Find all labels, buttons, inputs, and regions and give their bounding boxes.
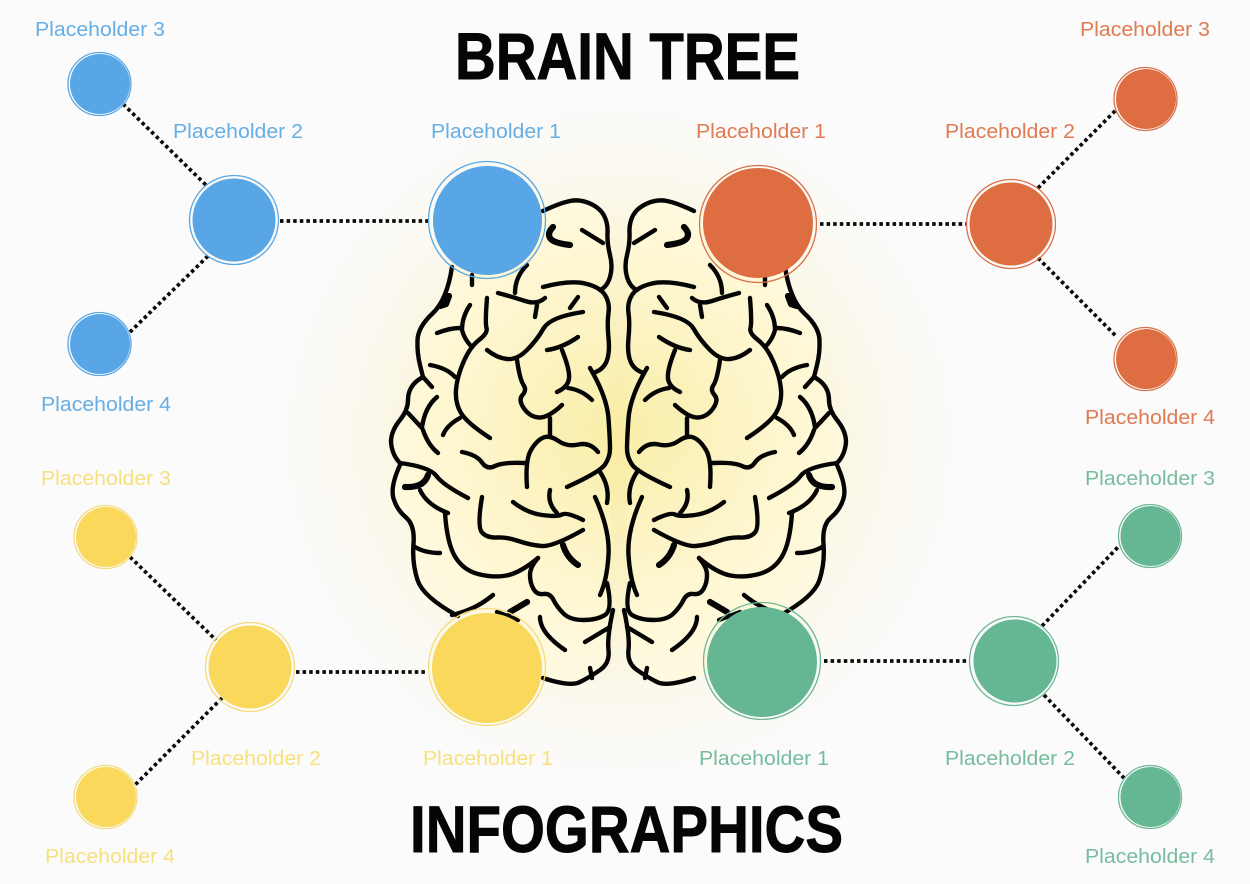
connector: orange node 2 to node 3 xyxy=(1038,110,1116,188)
blue node 4: Placeholder 4 xyxy=(41,394,171,416)
panel: orange branch xyxy=(696,19,1215,429)
panel: yellow branch xyxy=(41,468,553,868)
green node 4: Placeholder 4 xyxy=(1085,846,1215,868)
connector: green node 2 to node 3 xyxy=(1042,545,1120,626)
connector: yellow node 1 to node 2 xyxy=(296,670,428,674)
green node 4 xyxy=(1085,766,1215,868)
title: INFOGRAPHICS: INFOGRAPHICS xyxy=(410,792,843,866)
title: BRAIN TREE: BRAIN TREE xyxy=(455,19,800,93)
blue node 2: Placeholder 2 xyxy=(173,121,303,143)
connector: green node 1 to node 2 xyxy=(824,659,970,663)
orange node 1 xyxy=(696,121,826,282)
connector: yellow node 2 to node 3 xyxy=(130,557,216,640)
connector: orange node 1 to node 2 xyxy=(820,222,966,226)
connector: orange node 2 to node 4 xyxy=(1038,258,1116,336)
yellow node 1 xyxy=(423,608,553,770)
panel: green branch xyxy=(699,468,1215,868)
yellow node 3: Placeholder 3 xyxy=(41,468,171,490)
yellow node 1: Placeholder 1 xyxy=(423,748,553,770)
green node 3: Placeholder 3 xyxy=(1085,468,1215,490)
connector: blue node 1 to node 2 xyxy=(280,219,428,223)
orange node 4: Placeholder 4 xyxy=(1085,407,1215,429)
green node 2: Placeholder 2 xyxy=(945,748,1075,770)
brain right hemisphere xyxy=(624,200,847,687)
connector: blue node 2 to node 3 xyxy=(123,104,208,187)
blue node 4 xyxy=(41,312,171,416)
yellow node 2 xyxy=(191,622,321,770)
orange node 1: Placeholder 1 xyxy=(696,121,826,143)
orange node 4 xyxy=(1085,328,1215,429)
brain illustration xyxy=(390,200,847,687)
green node 1: Placeholder 1 xyxy=(699,748,829,770)
connector: blue node 2 to node 4 xyxy=(130,256,208,332)
panel: blue branch xyxy=(35,19,561,416)
blue node 1: Placeholder 1 xyxy=(431,121,561,143)
blue node 1 xyxy=(428,121,561,278)
connector: green node 2 to node 4 xyxy=(1044,695,1124,778)
orange node 3 xyxy=(1080,19,1210,130)
brain left hemisphere xyxy=(390,200,613,687)
green node 1 xyxy=(699,602,829,770)
blue node 3 xyxy=(35,19,165,116)
yellow node 4: Placeholder 4 xyxy=(45,846,175,868)
blue node 3: Placeholder 3 xyxy=(35,19,165,41)
connector: yellow node 2 to node 4 xyxy=(134,698,222,786)
yellow node 3 xyxy=(41,468,171,568)
orange node 2 xyxy=(945,121,1075,268)
green node 3 xyxy=(1085,468,1215,568)
orange node 3: Placeholder 3 xyxy=(1080,19,1210,41)
green node 2 xyxy=(945,616,1075,770)
yellow node 2: Placeholder 2 xyxy=(191,748,321,770)
orange node 2: Placeholder 2 xyxy=(945,121,1075,143)
blue node 2 xyxy=(173,121,303,264)
yellow node 4 xyxy=(45,766,175,868)
